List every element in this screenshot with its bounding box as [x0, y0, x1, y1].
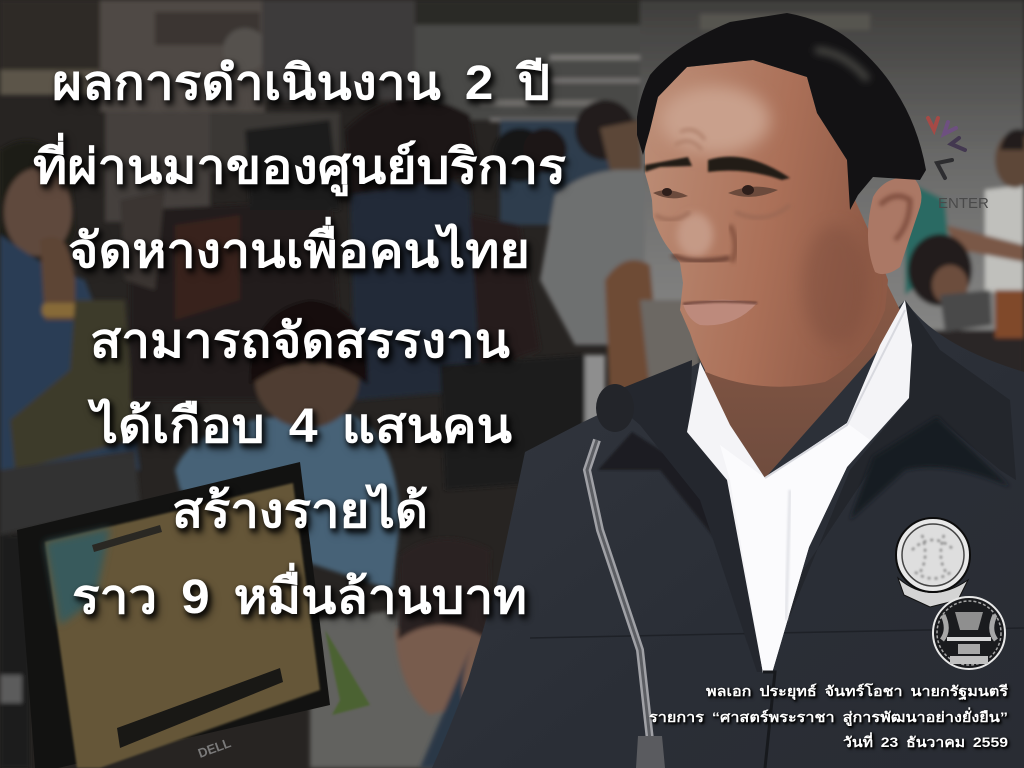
credit text: พลเอก ประยุทธ์ จันทร์โอชา นายกรัฐมนตรี — [706, 682, 1009, 701]
ear — [868, 177, 921, 274]
monitor brand: DELL — [196, 735, 233, 761]
credit text: รายการ “ศาสตร์พระราชา สู่การพัฒนาอย่างยั่งยืน” — [649, 707, 1008, 726]
shirt — [687, 300, 912, 673]
hair — [637, 13, 926, 210]
headline: ที่ผ่านมาของศูนย์บริการ — [33, 132, 566, 197]
left monitor — [17, 462, 370, 768]
wall sign text: ENTER — [938, 195, 989, 212]
nose highlight — [677, 213, 713, 257]
right background people — [985, 185, 1024, 300]
grey hair highlight — [815, 50, 868, 80]
right collar and inner shadow — [767, 300, 1016, 672]
headline: ได้เกือบ 4 แสนคน — [87, 397, 512, 453]
left inner lapel — [598, 432, 763, 668]
prime minister figure — [432, 13, 1024, 768]
microphone — [587, 384, 665, 768]
eyes — [653, 185, 790, 220]
jacket — [432, 300, 1024, 768]
headline: สร้างรายได้ — [172, 482, 428, 538]
desk — [310, 600, 490, 768]
centre logo on wall — [928, 118, 965, 178]
crowd — [130, 200, 345, 400]
headline: ผลการดำเนินงาน 2 ปี — [52, 57, 550, 110]
government seal — [933, 597, 1005, 669]
nose and mouth shadows — [672, 225, 757, 325]
headline — [33, 57, 566, 624]
credit text — [649, 682, 1009, 750]
zipper — [763, 672, 775, 768]
headline: ราว 9 หมื่นล้านบาท — [72, 562, 527, 624]
foreground person's head — [395, 539, 490, 768]
cheek shading — [803, 225, 867, 345]
forehead wrinkles — [675, 130, 705, 150]
forehead highlight — [660, 86, 770, 154]
eyebrows — [645, 157, 790, 180]
headline: จัดหางานเพื่อคนไทย — [68, 216, 530, 278]
credit text: วันที่ 23 ธันวาคม 2559 — [843, 732, 1008, 750]
jacket seam — [530, 628, 1024, 638]
headline: สามารถจัดสรรงาน — [90, 315, 510, 368]
face — [645, 60, 888, 387]
left person — [0, 140, 75, 275]
neck — [700, 270, 905, 478]
jacket emblem — [896, 518, 970, 607]
keyboard — [0, 450, 140, 535]
ceiling and walls — [0, 0, 100, 70]
seated person — [175, 415, 400, 590]
